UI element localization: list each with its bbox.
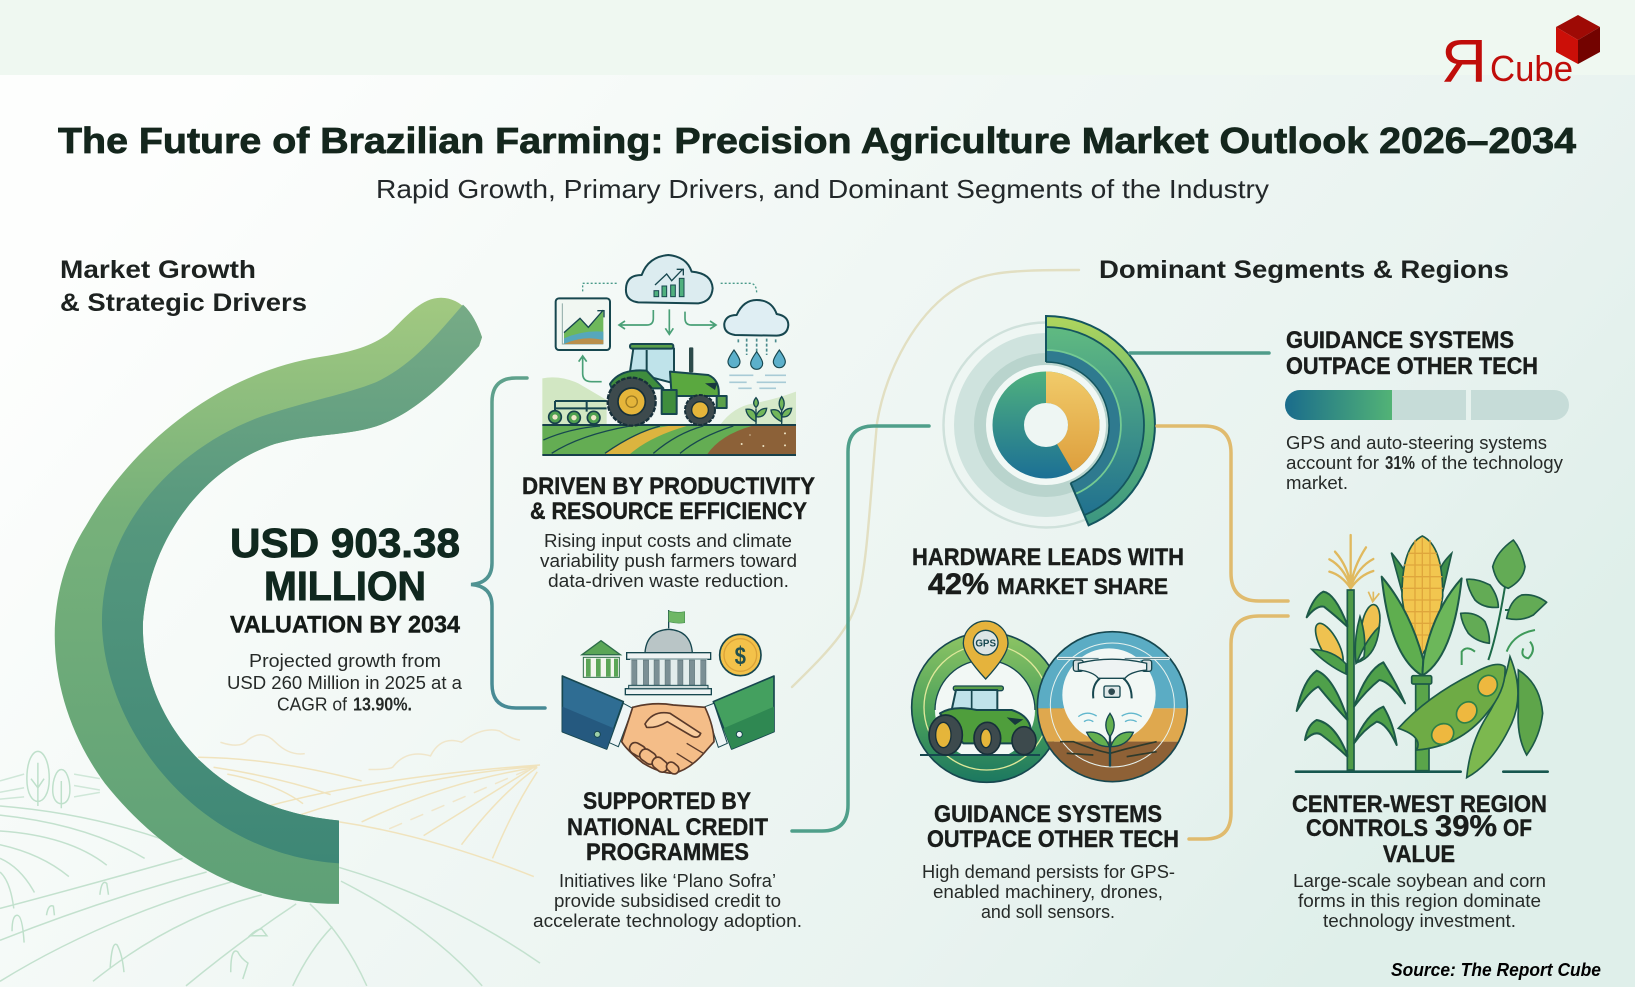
valuation description: USD 260 Million in 2025 at a <box>227 673 463 693</box>
top header band <box>0 0 1635 75</box>
center-west heading: OF <box>1503 815 1532 842</box>
inner donut green segment <box>992 372 1100 478</box>
guidance description upper: of the technology <box>1421 453 1563 473</box>
section heading: market growth: Market Growth <box>60 256 256 284</box>
inner teal band <box>102 305 482 863</box>
driver 2 description <box>533 871 802 931</box>
valuation description <box>227 651 463 714</box>
outer light green band <box>55 298 482 904</box>
valuation description: 13.90%. <box>353 694 412 714</box>
guidance description upper: GPS and auto-steering systems <box>1286 433 1547 453</box>
driver 2 heading: NATIONAL CREDIT <box>567 814 768 841</box>
center-west description: Large-scale soybean and corn <box>1293 871 1546 891</box>
icon: tractor with data and weather <box>542 255 796 455</box>
driver 2 heading: PROGRAMMES <box>586 839 749 866</box>
valuation description: CAGR of <box>277 694 348 714</box>
source note: Source: The Report Cube <box>1391 959 1601 980</box>
logo wordmark: Cube <box>1490 48 1573 89</box>
guidance heading lower <box>927 801 1179 853</box>
guidance heading upper <box>1286 327 1538 380</box>
center-west heading <box>1292 791 1547 868</box>
headline valuation: MILLION <box>264 563 426 609</box>
key figure block <box>227 520 463 714</box>
center-west heading: CENTER-WEST REGION <box>1292 791 1547 818</box>
hardware heading: MARKET SHARE <box>997 574 1168 599</box>
logo cube <box>1556 15 1600 64</box>
highlighted hardware sector <box>1046 316 1155 525</box>
driver 2 heading <box>567 788 768 866</box>
donut gray rings <box>944 322 1148 528</box>
center-west description <box>1293 871 1546 931</box>
driver 2 heading: SUPPORTED BY <box>583 788 751 815</box>
icon: handshake with institutions <box>562 610 774 776</box>
guidance heading lower: OUTPACE OTHER TECH <box>927 826 1179 853</box>
driver 2 description: Initiatives like ‘Plano Sofra’ <box>559 871 776 891</box>
center-west heading: 39% <box>1435 810 1497 843</box>
headline valuation: USD 903.38 <box>230 520 460 566</box>
center-west description: technology investment. <box>1323 911 1516 931</box>
subtitle: Rapid Growth, Primary Drivers, and Dominant Segments of the Industry <box>376 174 1269 204</box>
driver 1 description: variability push farmers toward <box>540 551 797 571</box>
hardware heading <box>912 544 1184 601</box>
section heading: dominant segments: Dominant Segments & Regions <box>1099 256 1509 284</box>
driver 1 heading: DRIVEN BY PRODUCTIVITY <box>522 473 815 500</box>
logo <box>1441 15 1600 95</box>
title: The Future of Brazilian Farming: Precision Agriculture Market Outlook 2026–2034 <box>58 120 1576 161</box>
section heading: market growth <box>60 256 307 317</box>
guidance heading lower: GUIDANCE SYSTEMS <box>934 801 1162 828</box>
logo mark: mirrored R: Я <box>1441 28 1487 95</box>
driver 2 description: accelerate technology adoption. <box>533 911 802 931</box>
valuation caption: VALUATION BY 2034 <box>230 612 460 638</box>
hardware heading: HARDWARE LEADS WITH <box>912 544 1184 571</box>
guidance description lower: enabled machinery, drones, <box>933 882 1163 902</box>
gold connectors to crops <box>1157 426 1288 839</box>
driver 1 description: Rising input costs and climate <box>544 531 792 551</box>
background field line art <box>0 730 540 986</box>
driver 1 heading: & RESOURCE EFFICIENCY <box>530 498 807 525</box>
icon: handshake with institutions: $ <box>735 642 746 670</box>
center-west heading: VALUE <box>1383 841 1455 868</box>
guidance description upper: account for <box>1286 453 1379 473</box>
donut hole <box>1024 403 1068 447</box>
icon: GPS tractor and drone circles: GPS <box>975 638 996 649</box>
guidance description lower: High demand persists for GPS- <box>922 862 1175 882</box>
center-west heading: CONTROLS <box>1306 815 1428 842</box>
driver 1 description <box>540 531 797 591</box>
guidance heading upper: OUTPACE OTHER TECH <box>1286 353 1538 380</box>
driver 2 description: provide subsidised credit to <box>554 891 781 911</box>
center-west description: forms in this region dominate <box>1298 891 1541 911</box>
line from donut to guidance block <box>1130 351 1269 355</box>
guidance heading upper: GUIDANCE SYSTEMS <box>1286 327 1514 354</box>
guidance description upper: 31% <box>1385 453 1415 473</box>
big C-shaped growth arc <box>55 298 482 904</box>
donut white separator <box>986 365 1106 485</box>
curved tan decorative connector <box>792 270 1079 687</box>
headline valuation <box>230 520 460 609</box>
guidance description lower: and soll sensors. <box>981 902 1115 922</box>
guidance description upper: market. <box>1286 473 1348 493</box>
valuation description: Projected growth from <box>249 651 441 671</box>
guidance description lower <box>922 862 1175 922</box>
icon: corn and soybean crops <box>1296 535 1548 778</box>
progress bar: 31 percent <box>1285 390 1569 420</box>
teal connector to segments <box>792 426 929 831</box>
brace connector to drivers <box>471 378 545 708</box>
inner donut gold segment <box>1046 372 1099 471</box>
driver 1 heading <box>522 473 815 525</box>
hardware heading: 42% <box>928 568 989 601</box>
icon: GPS tractor and drone circles <box>912 621 1190 785</box>
donut chart: hardware share <box>944 316 1155 528</box>
driver 1 description: data-driven waste reduction. <box>548 571 789 591</box>
section heading: market growth: & Strategic Drivers <box>60 289 307 317</box>
guidance description upper <box>1286 433 1563 493</box>
